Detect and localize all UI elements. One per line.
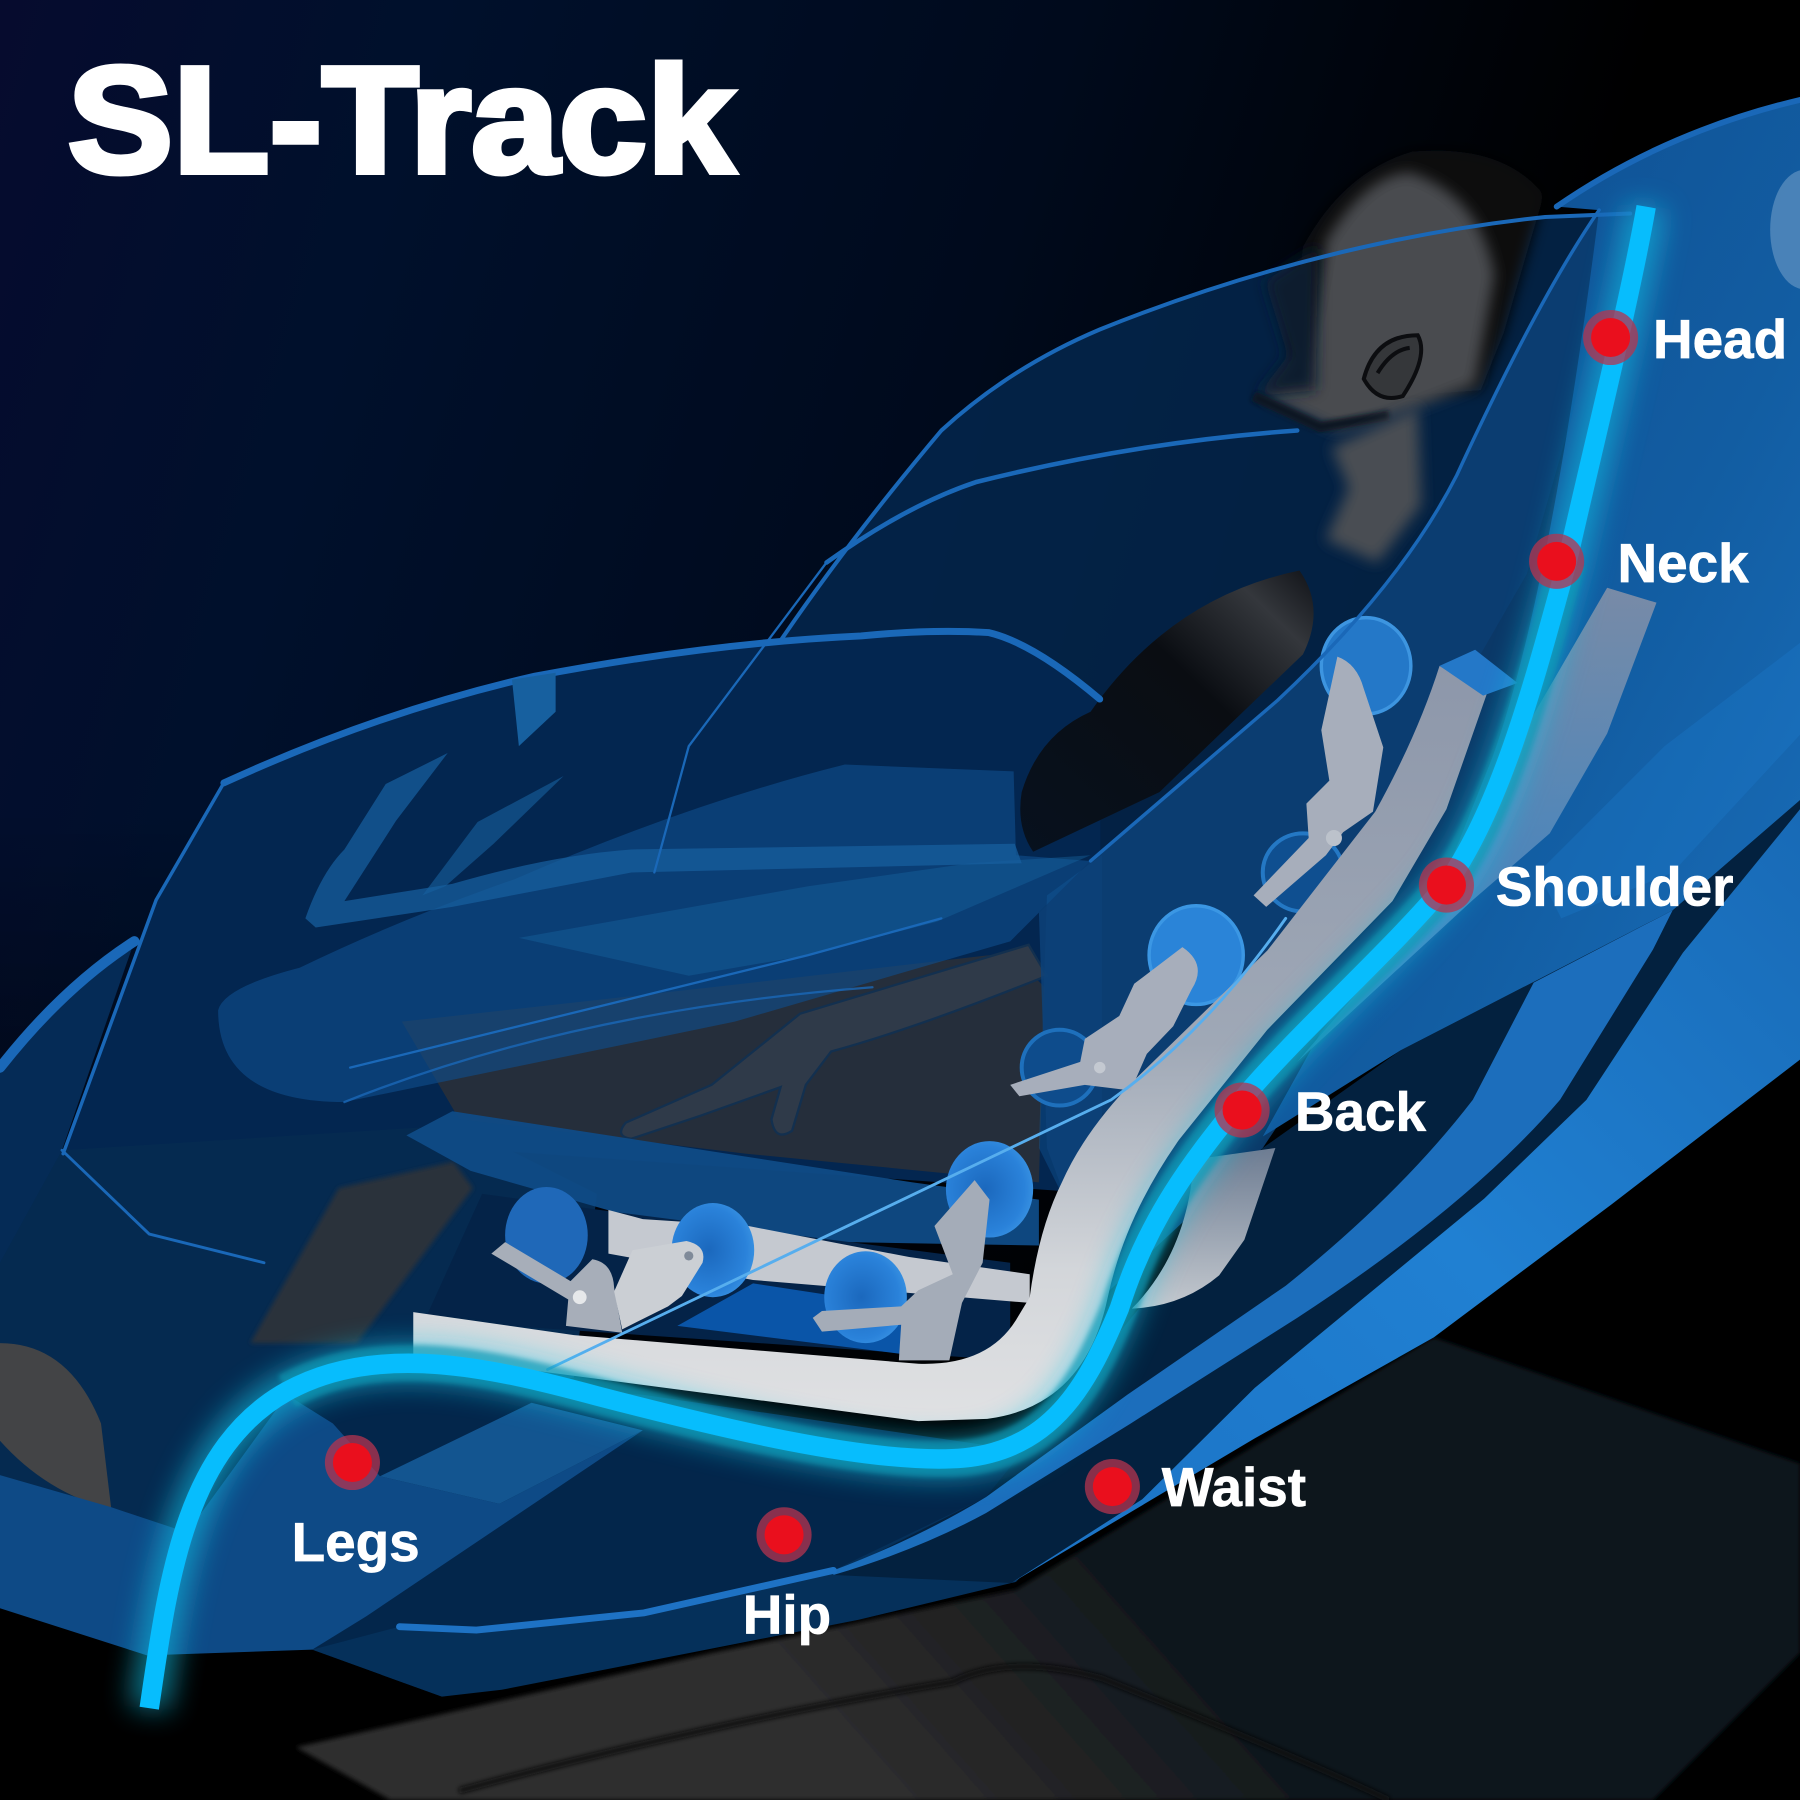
roller: upper front [1321, 618, 1411, 714]
foot section [0, 941, 264, 1538]
second backrest line [827, 430, 1297, 562]
marker: shoulder: Shoulder [1496, 856, 1734, 918]
roller arms [491, 657, 1383, 1360]
arm: mid [1010, 947, 1198, 1096]
roller: mid rear [1022, 1030, 1097, 1105]
jaw shadow [1254, 396, 1389, 427]
blue seat plate [677, 1283, 918, 1355]
strip one [833, 910, 1673, 1575]
navy underbody fill [184, 1148, 1274, 1697]
mechanism dark recess [425, 1194, 1010, 1360]
backrest top line [781, 214, 1630, 641]
chair pedestal base [296, 1337, 1800, 1800]
marker: waist: Waist [1162, 1456, 1306, 1518]
face shadow [1257, 247, 1318, 396]
track glow [149, 207, 1646, 1708]
armrest side panel [63, 631, 1102, 1240]
seat lower body [312, 1320, 1263, 1697]
head cushion [1770, 170, 1800, 289]
thigh shell [218, 765, 1091, 1102]
light panel beside track [1297, 588, 1657, 1062]
arm: lower far left [491, 1242, 622, 1333]
marker: waist [1085, 1456, 1306, 1518]
marker: neck [1529, 532, 1749, 594]
neck [1326, 408, 1421, 562]
backrest ghost panel [781, 214, 1630, 1148]
lap [402, 953, 1045, 1182]
arm: upper [1254, 657, 1383, 907]
lower seat line [399, 1570, 833, 1630]
marker: legs [292, 1435, 420, 1573]
backrest blue side [1039, 855, 1102, 1194]
mid back panel [1039, 210, 1607, 1297]
hair [1291, 150, 1544, 402]
arm: lower middle [614, 1241, 703, 1329]
shell streak [1538, 643, 1800, 918]
ear [1364, 335, 1421, 398]
backrest and armrest rear panels [0, 214, 1630, 1538]
bright lower band [1011, 809, 1800, 1583]
roller: lower right rear [946, 1141, 1033, 1238]
calf and leg area fill [0, 1125, 597, 1538]
calf [250, 1162, 473, 1343]
roller: lower far left [505, 1187, 588, 1283]
marker: hip [743, 1507, 831, 1646]
lighter rail diagonal [548, 918, 1286, 1370]
lower curved rail [1132, 1148, 1275, 1309]
white roller track rail [413, 666, 1487, 1421]
marker: back: Back [1295, 1081, 1427, 1143]
marker: neck: Neck [1617, 532, 1749, 594]
SL-Track cyan line [149, 207, 1646, 1708]
title: SL-Track [68, 36, 735, 205]
torso [1020, 571, 1314, 852]
top armrest rail [224, 631, 1100, 783]
cross plate [608, 1210, 1030, 1303]
roller: mid front [1149, 906, 1243, 1004]
human figure silhouette [0, 150, 1544, 1510]
marker: head [1583, 308, 1787, 370]
armrest tab [512, 673, 556, 746]
arm top band [305, 753, 1022, 928]
inner arc [422, 776, 564, 895]
foot [0, 1343, 111, 1510]
arm: lower right [813, 1180, 990, 1360]
roller: lower right [824, 1251, 907, 1343]
roller: lower middle [672, 1203, 754, 1297]
roller: upper rear [1263, 833, 1343, 911]
rail top face [1440, 650, 1518, 696]
vertical ghost line [654, 562, 827, 872]
rollers behind rail [505, 618, 1411, 1303]
translucent armrest and thigh overlays [218, 753, 1102, 1246]
leg wedge [380, 1403, 643, 1504]
marker: head: Head [1653, 308, 1787, 370]
lower leg panel [0, 1395, 643, 1655]
armrest top highlight [519, 855, 1091, 976]
seat cross bar [406, 1111, 1039, 1246]
dark gap [833, 800, 1800, 1583]
marker: hip: Hip [743, 1584, 831, 1646]
marker: legs: Legs [292, 1511, 420, 1573]
face [1263, 172, 1495, 430]
right backrest shell [1263, 100, 1800, 1136]
arm and hand [621, 945, 1047, 1139]
marker: back [1215, 1081, 1427, 1143]
teal shadow under track [287, 562, 1567, 1459]
